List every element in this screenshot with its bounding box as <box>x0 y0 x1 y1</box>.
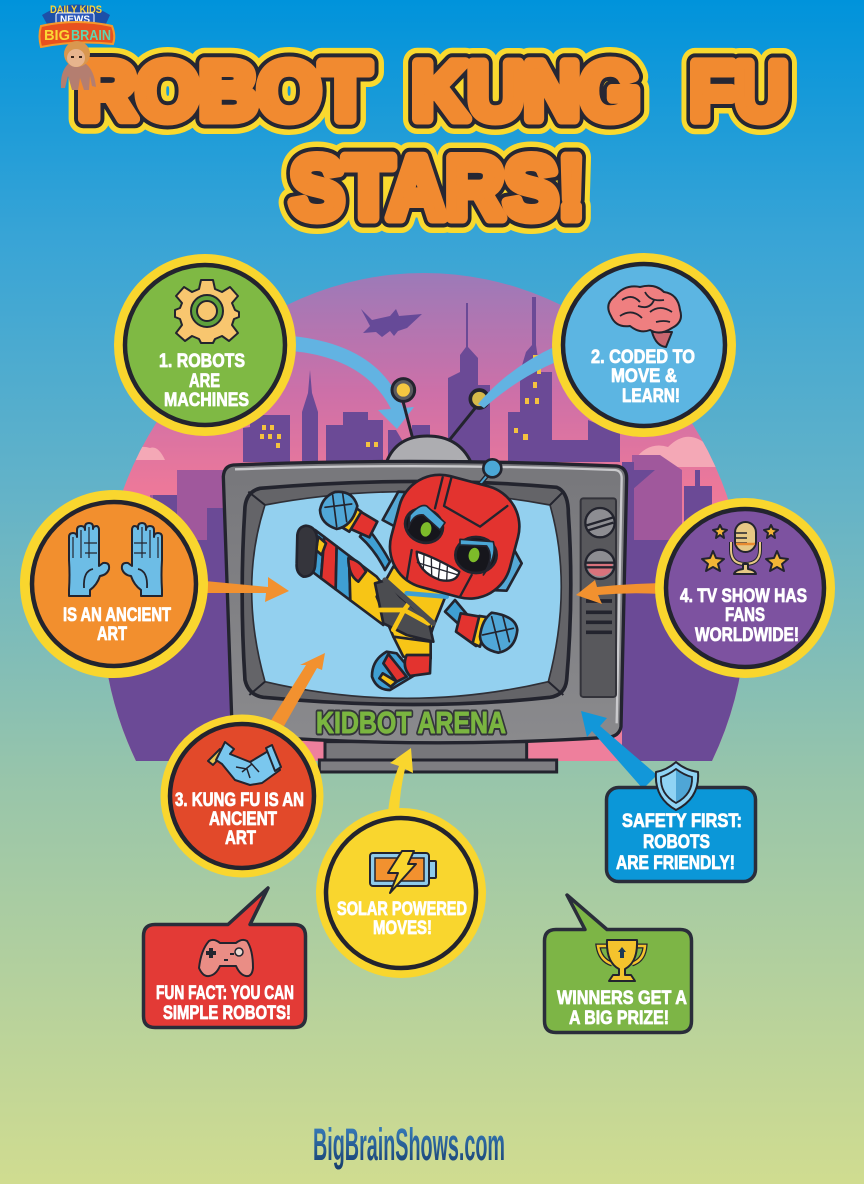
lower leg <box>372 637 431 690</box>
label: SAFETY FIRST: <box>622 811 742 832</box>
title line one <box>78 46 788 137</box>
title line one: FU <box>690 46 788 137</box>
label: 2. CODED TO <box>591 347 695 368</box>
label: ART <box>97 624 127 645</box>
callout: fun fact <box>144 888 306 1028</box>
icon: gear <box>175 280 239 343</box>
head <box>381 465 529 608</box>
title line one: FU <box>690 46 788 137</box>
title line one: ROBOT <box>78 46 370 137</box>
control panel <box>581 498 616 697</box>
label: LEARN! <box>622 386 680 407</box>
clouds <box>127 437 730 467</box>
label: WINNERS GET A <box>557 988 687 1009</box>
tv brand: kidbot arena: KIDBOT ARENA <box>316 705 506 740</box>
kicking leg <box>297 526 390 625</box>
backpack <box>383 492 522 591</box>
logo: Daily Kids News with Big Brain <box>40 4 114 47</box>
tv body <box>223 461 627 743</box>
label <box>557 988 687 1029</box>
title line one: ROBOT <box>78 46 370 137</box>
label <box>63 605 171 645</box>
circle: kung fu is an ancient art <box>160 714 324 878</box>
label: ANCIENT <box>209 809 277 830</box>
infographic canvas: BigBrainShows.com <box>313 1119 505 1170</box>
right arm <box>445 600 517 653</box>
antenna dome <box>387 436 471 462</box>
title line one: ROBOT <box>78 46 370 137</box>
logo mascot <box>61 41 96 90</box>
icon: left glove <box>69 523 109 596</box>
torso <box>375 567 447 647</box>
label <box>337 899 467 939</box>
arrow: orange to screen right <box>576 580 662 604</box>
bezel corners <box>248 492 563 695</box>
logo: Daily Kids News with Big Brain: BRAIN <box>71 27 111 44</box>
label: ROBOTS <box>643 832 710 853</box>
label: ARE FRIENDLY! <box>616 853 735 874</box>
icon: right glove <box>122 523 162 596</box>
label <box>175 790 304 849</box>
grin <box>417 552 459 581</box>
label: MOVE & <box>611 366 677 387</box>
circle: robots are machines <box>114 254 296 436</box>
arrow: orange to screen left <box>205 577 289 602</box>
label: IS AN ANCIENT <box>63 605 171 626</box>
icon: flying jet silhouette <box>361 309 422 337</box>
label: FUN FACT: YOU CAN <box>156 983 294 1004</box>
circle: is an ancient art <box>20 490 208 678</box>
title line one: KUNG <box>412 46 640 137</box>
label: 1. ROBOTS <box>159 351 245 372</box>
title line two: STARS! <box>290 138 585 237</box>
tv highlight edge <box>235 466 622 723</box>
label: FANS <box>725 605 765 626</box>
arrow: yellow from solar <box>388 748 413 812</box>
callout: safety first <box>606 762 756 882</box>
icon: handshake <box>208 742 281 785</box>
title line one: KUNG <box>412 46 640 137</box>
label: MOVES! <box>373 918 432 939</box>
lower city sides <box>150 455 682 540</box>
logo: Daily Kids News with Big Brain: DAILY KIDS <box>50 4 102 16</box>
label: 4. TV SHOW HAS <box>680 586 807 607</box>
logo: Daily Kids News with Big Brain: BIG <box>44 27 70 44</box>
screen bezel <box>242 481 571 704</box>
label <box>680 586 807 646</box>
icon: battery <box>370 851 436 893</box>
callout: winners <box>544 895 692 1032</box>
arrow: blue from robots are machines <box>292 336 414 429</box>
skyline <box>243 297 620 462</box>
arrow: orange from kung fu <box>270 653 325 726</box>
logo: Daily Kids News with Big Brain: NEWS <box>60 14 90 26</box>
label: SOLAR POWERED <box>337 899 467 920</box>
title line two: STARS! <box>290 138 585 237</box>
antenna right <box>450 390 488 439</box>
label: 3. KUNG FU IS AN <box>175 790 304 811</box>
label: ARE <box>189 371 220 392</box>
label <box>591 347 695 407</box>
title line two: STARS! <box>290 138 585 237</box>
icon: shield <box>656 762 698 810</box>
label: SIMPLE ROBOTS! <box>163 1003 291 1024</box>
left eye <box>399 502 449 549</box>
label <box>159 351 249 411</box>
title line one: FU <box>690 46 788 137</box>
arrow: blue from safety first <box>581 711 657 789</box>
robot character <box>297 459 529 690</box>
label <box>156 983 294 1024</box>
icon: brain <box>608 286 681 347</box>
tv brand: kidbot arena: KIDBOT ARENA <box>316 705 506 740</box>
title line one: KUNG <box>412 46 640 137</box>
label: WORLDWIDE! <box>695 625 799 646</box>
circle: coded to move and learn <box>552 253 736 437</box>
left arm <box>320 492 390 570</box>
circle: solar powered moves <box>316 808 486 978</box>
icon: game controller <box>199 940 253 976</box>
television with robot <box>223 379 627 772</box>
head panels <box>407 477 507 597</box>
building windows <box>260 355 541 448</box>
icon: microphone and stars <box>702 522 788 574</box>
screen <box>252 492 561 698</box>
title <box>78 46 788 237</box>
antenna left <box>392 379 415 438</box>
label: A BIG PRIZE! <box>569 1008 669 1029</box>
label: MACHINES <box>164 390 249 411</box>
right eye <box>455 537 497 575</box>
label: ART <box>225 828 256 849</box>
head antenna <box>480 459 501 484</box>
label <box>616 811 742 874</box>
circle: tv show has fans <box>655 498 835 678</box>
dome city backdrop <box>90 260 760 770</box>
stand <box>319 742 557 772</box>
arrow: blue from coded to move <box>478 346 556 408</box>
icon: trophy <box>598 940 645 981</box>
